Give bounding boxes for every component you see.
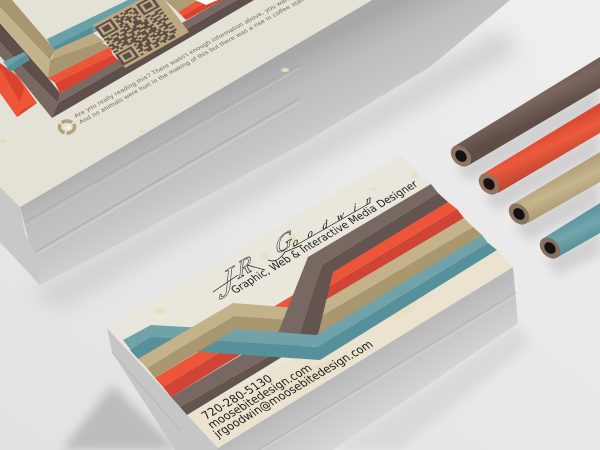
signature: G: [275, 224, 293, 261]
tan pencil: [505, 152, 600, 241]
right side of stack: [218, 267, 518, 450]
back teal stripe: [123, 325, 240, 359]
email: jrgoodwin@moosebitedesign.com: [210, 338, 376, 441]
teal stripe: [3, 0, 165, 72]
small card stack (centre): [62, 155, 530, 450]
soft shadow on the right of stack: [335, 323, 530, 450]
front teal stripe: [200, 235, 497, 360]
tan stripe: [138, 218, 482, 378]
tan stripe: [0, 0, 198, 78]
stain marks: [0, 68, 289, 143]
red stripe: [155, 202, 464, 397]
signature: [213, 192, 372, 309]
brown stripe: [0, 0, 254, 118]
small card face: [107, 155, 513, 448]
phone number: 720-280-5130: [199, 372, 275, 422]
stripe artwork: [0, 0, 254, 118]
pencils (right): [447, 57, 600, 275]
signature: J: [217, 257, 236, 309]
red pencil: [475, 103, 600, 211]
red corner: [0, 63, 37, 117]
large card face: [0, 0, 372, 207]
shadow of small stack: [62, 385, 178, 450]
signature: R: [236, 249, 253, 285]
large card stack (top-left): [0, 0, 520, 310]
signature: oodwin: [292, 192, 372, 250]
brown stripe with bend: [171, 184, 448, 415]
red stripe: [48, 0, 222, 93]
left side of stack: [107, 328, 218, 450]
QR code: [93, 0, 189, 68]
white label fragment: [195, 0, 218, 5]
stain marks: [153, 172, 513, 448]
job title: Graphic, Web & Interactive Media Designer: [228, 178, 421, 296]
teal pencil: [536, 203, 600, 275]
brown pencil: [447, 57, 600, 182]
shadow of large stack: [30, 30, 520, 310]
icon: recycling symbol: [60, 121, 74, 133]
side of large stack: [0, 0, 510, 285]
website: moosebitedesign.com: [205, 361, 315, 431]
